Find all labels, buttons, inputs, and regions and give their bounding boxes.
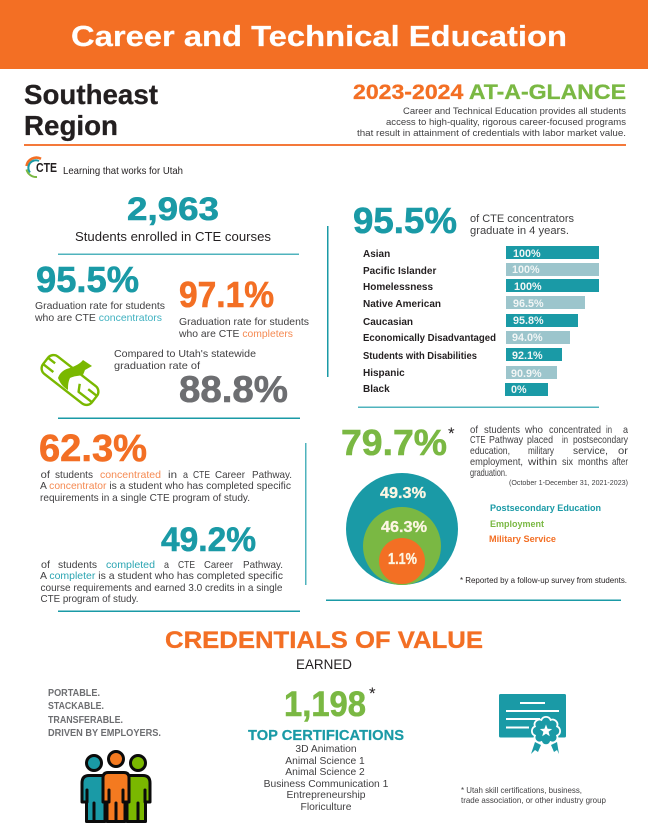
region heading: Southeast — [24, 79, 158, 110]
row: Pacific Islander: Pacific Islander — [363, 266, 436, 277]
survey footnote: * Reported by a follow-up survey from students. — [460, 576, 627, 585]
circle legend: Postsecondary Education — [490, 503, 601, 514]
placement description: (October 1-December 31, 2021-2023) — [509, 478, 628, 487]
certification footnote — [461, 786, 606, 805]
stat: completed a pathway: Pathway. — [243, 560, 283, 571]
row: Asian: Asian — [363, 249, 390, 260]
intro text: that result in attainment of credentials with labor market value. — [357, 128, 626, 138]
credential qualities — [48, 688, 161, 739]
placement description: or — [618, 446, 629, 457]
at-a-glance heading: 2023-2024 AT-A-GLANCE — [353, 81, 626, 104]
row: Students with Disabilities: Students with Disabilities — [363, 351, 477, 362]
row: Native American: 96.5% — [513, 298, 544, 310]
placement description: who — [524, 425, 543, 436]
stat: credentials earned: * — [369, 684, 376, 703]
row: Caucasian: Caucasian — [363, 317, 413, 328]
placement description: in — [562, 435, 568, 446]
placement description: six — [562, 457, 574, 468]
placement description: of — [470, 425, 478, 436]
stat: completed a pathway: 49.2% — [161, 521, 256, 559]
top certifications list: Animal Science 2 — [285, 767, 365, 778]
top certifications list: 3D Animation — [295, 744, 357, 755]
stat: enrolled students: Students enrolled in CTE courses — [75, 229, 272, 244]
row: Caucasian — [363, 314, 578, 328]
stat: completer graduation rate: who are CTE completers — [178, 329, 293, 340]
title: Career and Technical Education — [71, 21, 567, 53]
stat: concentrated in a pathway — [39, 428, 292, 504]
statewide comparison — [114, 349, 288, 410]
credential qualities: PORTABLE. — [48, 688, 100, 699]
placement description: placed — [527, 435, 553, 446]
row: Black: 0% — [511, 384, 527, 396]
top certifications list: TOP CERTIFICATIONS — [248, 728, 404, 744]
placement description — [470, 425, 629, 487]
placement description: months — [578, 457, 608, 468]
row: Asian: 100% — [513, 248, 541, 260]
stat: placement rate: 79.7% — [341, 422, 447, 463]
stat: concentrated in a pathway: A concentrator is a student who has completed specific — [40, 481, 291, 492]
placement description: graduation. — [470, 468, 507, 479]
row: Economically Disadvantaged: 94.0% — [512, 332, 543, 344]
stat: concentrator graduation rate: Graduation rate for students — [35, 301, 165, 312]
placement description: after — [612, 457, 628, 468]
stat: concentrated in a pathway: of — [41, 470, 50, 481]
stat: concentrated in a pathway: requirements in a single CTE program of study. — [40, 493, 250, 504]
top certifications list — [248, 728, 404, 813]
intro text — [357, 106, 626, 138]
stat: enrolled students — [75, 191, 272, 244]
top certifications list: Animal Science 1 — [285, 756, 365, 767]
placement description: education, — [470, 446, 510, 457]
row: Pacific Islander — [363, 263, 599, 277]
statewide comparison: graduation rate of — [114, 361, 200, 372]
placement description: a — [623, 425, 628, 436]
certification footnote: trade association, or other industry group — [461, 796, 606, 805]
stat: completed a pathway: a — [164, 560, 169, 571]
circle legend: Employment — [490, 519, 545, 530]
stat: concentrated in a pathway: concentrated — [100, 470, 161, 481]
placement description: postsecondary — [573, 435, 629, 446]
placement description: service, — [573, 446, 608, 457]
row: Hispanic — [363, 366, 557, 380]
placement description: students — [484, 425, 520, 436]
region heading — [24, 79, 158, 141]
icon: three people — [82, 752, 150, 822]
credential qualities: STACKABLE. — [48, 701, 104, 712]
top certifications list: Business Communication 1 — [264, 779, 389, 790]
statewide comparison: 88.8% — [179, 369, 288, 410]
intro text: access to high-quality, rigorous career-focused programs — [386, 117, 626, 127]
stat: completed a pathway: Career — [204, 560, 234, 571]
row: Asian — [363, 246, 599, 260]
row: Native American: Native American — [363, 299, 441, 310]
credentials heading: CREDENTIALS OF VALUE — [165, 627, 483, 654]
intro text: Career and Technical Education provides all students — [403, 106, 626, 116]
top certifications list: Entrepreneurship — [286, 790, 366, 801]
stat: concentrated in a pathway: Career — [215, 470, 246, 481]
nested circle chart: 49.3% — [380, 485, 426, 502]
placement description: Pathway — [489, 435, 524, 446]
circle legend — [489, 503, 601, 545]
stat: concentrator graduation rate: 95.5% — [36, 259, 139, 300]
stat: graduate in 4 years — [353, 200, 574, 241]
top certifications list: Floriculture — [301, 802, 352, 813]
placement description: employment, — [470, 457, 523, 468]
stat: graduate in 4 years: graduate in 4 years. — [470, 225, 569, 237]
stat: concentrated in a pathway: students — [55, 470, 93, 481]
CTE logo — [26, 158, 183, 177]
statewide comparison: Compared to Utah's statewide — [114, 349, 256, 360]
stat: completed a pathway: CTE — [178, 560, 195, 571]
row: Economically Disadvantaged: Economically Disadvantaged — [363, 333, 496, 344]
row: Economically Disadvantaged — [363, 331, 570, 344]
stat: completed a pathway: completed — [106, 560, 155, 571]
nested circle chart — [346, 473, 458, 585]
stat: completed a pathway: CTE program of study. — [40, 594, 138, 605]
stat: credentials earned: 1,198 — [284, 685, 366, 724]
stat: completed a pathway — [40, 521, 283, 605]
row: Pacific Islander: 100% — [512, 264, 540, 276]
row: Hispanic: Hispanic — [363, 368, 405, 379]
row: Black — [363, 383, 548, 396]
nested circle chart: 46.3% — [381, 519, 427, 536]
stat: concentrated in a pathway: in — [168, 470, 177, 481]
placement description: concentrated — [549, 425, 601, 436]
placement description: military — [528, 446, 555, 457]
icon: diploma scroll — [39, 352, 101, 408]
row: Homelessness — [363, 279, 599, 293]
stat: graduate in 4 years: of CTE concentrators — [470, 213, 574, 225]
row: Homelessness: Homelessness — [363, 282, 433, 293]
stat: completer graduation rate — [178, 274, 309, 340]
bar chart: graduation by group — [363, 246, 599, 396]
stat: placement rate: * — [448, 424, 455, 443]
credentials heading — [165, 627, 483, 672]
stat: completed a pathway: of — [41, 560, 50, 571]
stat: concentrated in a pathway: a — [183, 470, 188, 481]
CTE logo: CTE — [36, 161, 57, 175]
row: Students with Disabilities — [363, 348, 562, 362]
credential qualities: TRANSFERABLE. — [48, 715, 123, 726]
stat: concentrator graduation rate: who are CTE concentrators — [34, 313, 162, 324]
icon: certificate — [499, 694, 566, 754]
stat: completed a pathway: A completer is a student who has completed specific — [40, 571, 283, 582]
stat: concentrated in a pathway: 62.3% — [39, 428, 147, 470]
row: Black: Black — [363, 384, 390, 395]
row: Students with Disabilities: 92.1% — [512, 350, 543, 362]
row: Native American — [363, 296, 585, 310]
stat: concentrator graduation rate — [34, 259, 165, 324]
credentials heading: EARNED — [296, 657, 352, 672]
placement description: in — [606, 425, 612, 436]
stat: completer graduation rate: Graduation rate for students — [179, 317, 309, 328]
nested circle chart: 1.1% — [388, 551, 417, 568]
stat: completed a pathway: students — [58, 560, 97, 571]
stat: graduate in 4 years: 95.5% — [353, 200, 457, 241]
CTE logo: Learning that works for Utah — [63, 165, 183, 177]
stat: concentrated in a pathway: Pathway. — [252, 470, 292, 481]
stat: completer graduation rate: 97.1% — [179, 274, 274, 315]
placement description: within — [527, 457, 557, 468]
region heading: Region — [24, 110, 118, 141]
row: Homelessness: 100% — [514, 281, 542, 293]
circle legend: Military Service — [489, 534, 556, 545]
row: Caucasian: 95.8% — [513, 315, 544, 327]
certification footnote: * Utah skill certifications, business, — [461, 786, 582, 795]
header banner — [0, 0, 648, 69]
row: Hispanic: 90.9% — [511, 368, 542, 380]
stat: concentrated in a pathway: CTE — [193, 470, 210, 481]
stat: enrolled students: 2,963 — [127, 191, 219, 227]
stat: completed a pathway: course requirements and earned 3.0 credits in a single — [40, 583, 283, 594]
credential qualities: DRIVEN BY EMPLOYERS. — [48, 728, 161, 739]
placement description: CTE — [470, 435, 486, 446]
